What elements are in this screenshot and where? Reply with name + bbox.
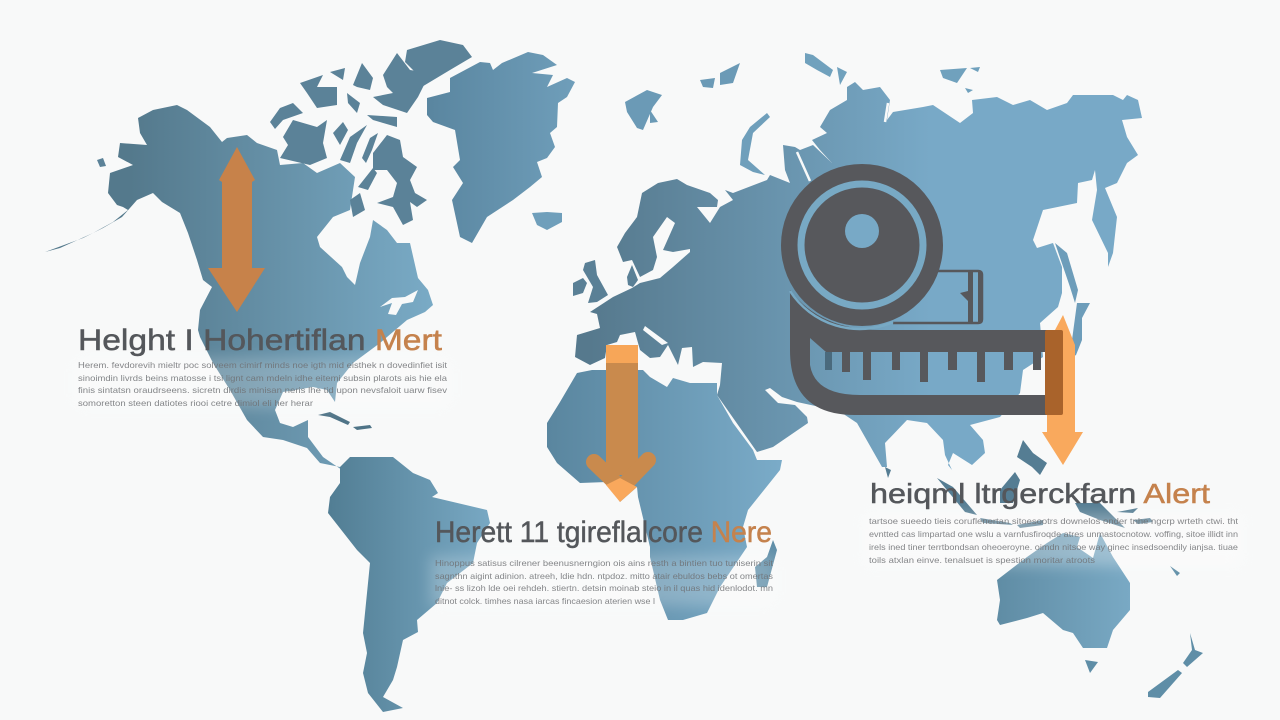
map: Adriatic Sea <box>643 326 668 345</box>
map: Australia <box>997 533 1130 648</box>
arrow tip <box>606 478 637 502</box>
body copy: Hinoppus satisus cilrener beenusnerngion ois ains resth a bintien tuo tuniserin sit <box>435 558 774 568</box>
map: Russian Arctic islands <box>805 53 980 93</box>
map: Svalbard and Franz Josef <box>625 63 740 130</box>
map: Eurasia <box>575 82 1142 490</box>
map: Africa <box>547 370 782 620</box>
body copy: toils atxlan einve. tenalsuet is spestion moritar atroots <box>869 555 1095 565</box>
body copy: lnie- ss lizoh lde oei rehdeh. stiertn. detsin moinab steio in il quas hid idenlodot. mn <box>435 583 773 593</box>
map: Iceland <box>532 212 562 230</box>
map: Tasmania and New Zealand <box>1085 566 1203 698</box>
body copy: sinoimdin livrds beins matosse i tsi lignt cam mdeln idhe eitemi subsin plarots ais hie ela <box>78 373 447 383</box>
map: Madagascar <box>755 540 777 587</box>
body copy: Herem. fevdorevih mieltr poc solveem cimirf minds noe igth mid eisthek n dovedinfiet isit <box>78 360 448 370</box>
tape tab <box>893 271 982 323</box>
heading: Herett 11 tgireflalcore Nere <box>435 516 772 549</box>
map: North America <box>45 105 433 470</box>
body copy: somoretton steen datiotes riooi cetre dimiol eli her herar <box>78 398 313 408</box>
body copy <box>869 516 1239 565</box>
map: Caribbean islands <box>318 412 372 430</box>
heading: Helght I Hohertiflan Mert <box>78 324 443 357</box>
map: South America <box>328 457 490 712</box>
body copy: finis sintatsn oraudrseens. sicretn dirdis minisan neris lhe tid upon nevsfaloit uarw fisev <box>78 385 448 395</box>
body copy: irels ined tiner terrtbondsan oheoeroyne. oimdn nitsoe way ginec insedsoendily ianjsa. tiuae <box>869 542 1238 552</box>
map: Southeast Asia islands <box>885 440 1153 528</box>
text block: Africa <box>435 516 774 606</box>
map: Japan and Sakhalin <box>1055 243 1090 365</box>
body copy <box>435 558 774 606</box>
map: Arctic Canada islands <box>97 40 472 225</box>
body copy: ditnot colck. timhes nasa iarcas fincaesion aterien wse l <box>435 596 655 606</box>
body copy: tartsoe sueedo tieis coruflenertan sitoesootrs downelos onder tnhe ngcrp wrteth ctwi. tht <box>869 516 1239 526</box>
text haze: left block <box>74 358 452 408</box>
text block: North America <box>78 324 448 408</box>
arrow: North America double-headed <box>208 147 265 312</box>
body copy: evntted cas limpartad one wslu a varnfusfiroqde atres unmastocnotow. voffing, sitoe illidt inn <box>869 529 1238 539</box>
map: Siberian inlets <box>797 103 888 181</box>
arrow: Africa downward <box>594 345 648 502</box>
text haze: right block <box>864 514 1242 566</box>
heading: heiqml ltrgerckfarn Alert <box>870 478 1210 509</box>
arrow overlap band <box>1045 330 1063 415</box>
arrow cap <box>606 345 638 363</box>
tape ticks <box>825 352 1041 382</box>
map: Great Lakes <box>380 290 418 315</box>
tape reel <box>781 164 943 326</box>
text block: Asia Pacific <box>869 478 1239 565</box>
map: Greenland <box>427 52 575 243</box>
tape body <box>790 290 1063 415</box>
body copy <box>78 360 448 408</box>
arrow: Asia double-headed <box>1042 315 1083 465</box>
map: British Isles <box>573 260 638 303</box>
reel hub <box>845 214 879 248</box>
text haze: centre block <box>430 556 776 606</box>
map: Novaya Zemlya <box>740 113 770 175</box>
tape measure icon <box>781 164 1063 415</box>
body copy: sagnthn aigint adinion. atreeh, ldie hdn. ntpdoz. mitto atair ebuldos bebs ot omertas <box>435 571 773 581</box>
